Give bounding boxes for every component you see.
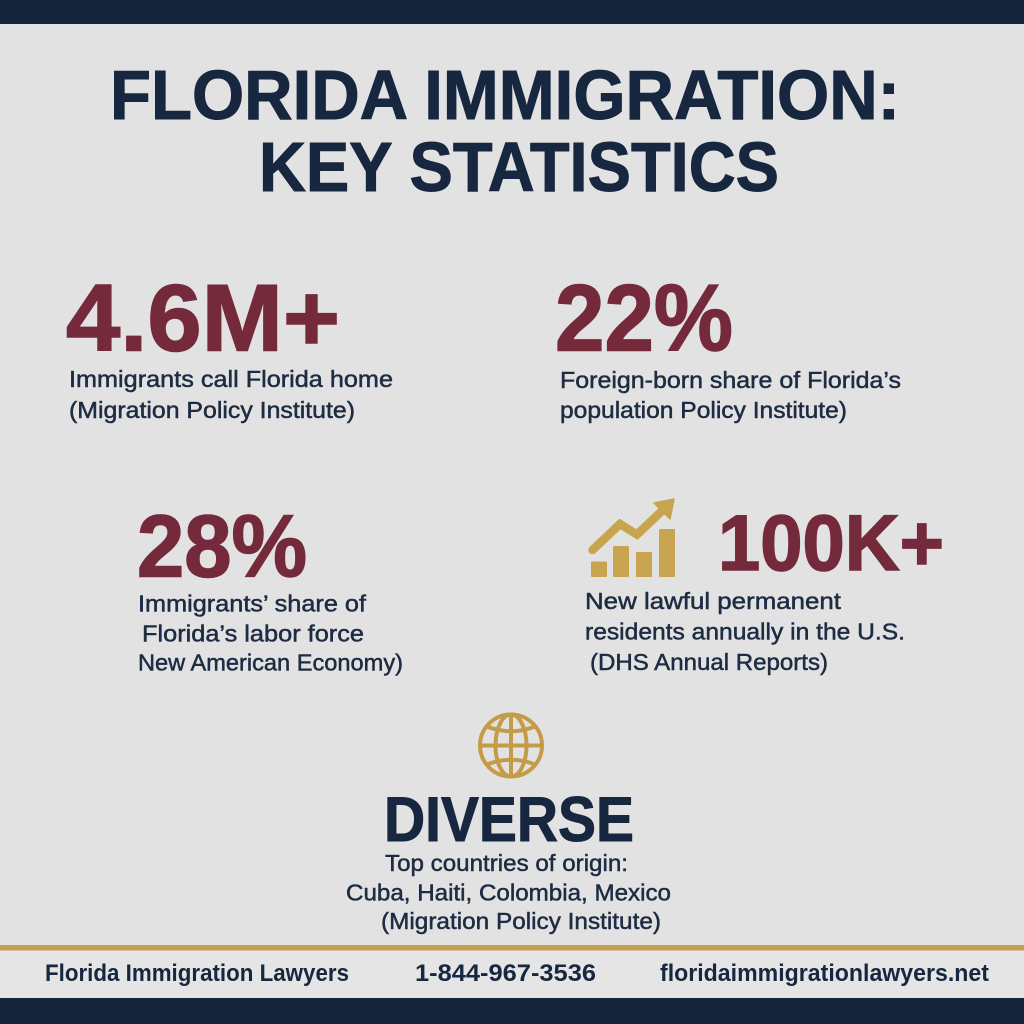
diverse block xyxy=(346,785,671,934)
stat: 100K+ new residents: 100K+ xyxy=(718,498,944,587)
stat: 28% labor force: Florida’s labor force xyxy=(142,620,364,646)
footer strip: Florida Immigration Lawyers xyxy=(45,960,349,987)
bottom navy bar xyxy=(0,998,1024,1024)
stat: 100K+ new residents: New lawful permanent xyxy=(585,588,842,614)
stat: 100K+ new residents: (DHS Annual Reports) xyxy=(590,649,828,675)
stat: 28% labor force: Immigrants’ share of xyxy=(138,590,366,616)
title xyxy=(110,56,900,206)
stat: 4.6M+ immigrants: Immigrants call Florida home xyxy=(69,366,393,392)
diverse block: DIVERSE xyxy=(384,785,634,855)
footer strip: 1-844-967-3536 xyxy=(415,960,596,987)
diverse block: Top countries of origin: xyxy=(385,850,628,876)
stat: 22% foreign-born share: Foreign-born share of Florida’s xyxy=(560,367,901,393)
footer strip xyxy=(0,945,1024,998)
title: FLORIDA IMMIGRATION: xyxy=(110,56,900,134)
stat: 28% labor force: 28% xyxy=(137,496,307,596)
stat: 4.6M+ immigrants: (Migration Policy Institute) xyxy=(69,397,355,423)
stat: 100K+ new residents: residents annually in the U.S. xyxy=(585,618,905,644)
stat: 4.6M+ immigrants: 4.6M+ xyxy=(66,266,340,372)
footer strip: floridaimmigrationlawyers.net xyxy=(660,960,989,987)
stat: 100K+ new residents xyxy=(585,498,944,675)
stat: 22% foreign-born share: 22% xyxy=(555,266,733,372)
top navy bar xyxy=(0,0,1024,24)
stat: 22% foreign-born share xyxy=(555,266,901,423)
title: KEY STATISTICS xyxy=(259,128,779,206)
stat: 28% labor force xyxy=(137,496,403,676)
icon: globe xyxy=(480,714,542,776)
stat: 22% foreign-born share: population Policy Institute) xyxy=(560,397,847,423)
stat: 4.6M+ immigrants xyxy=(66,266,393,423)
icon: rising bar chart with arrow xyxy=(591,499,675,577)
diverse block: (Migration Policy Institute) xyxy=(381,908,661,934)
stat: 28% labor force: New American Economy) xyxy=(138,650,403,676)
diverse block: Cuba, Haiti, Colombia, Mexico xyxy=(346,880,671,906)
